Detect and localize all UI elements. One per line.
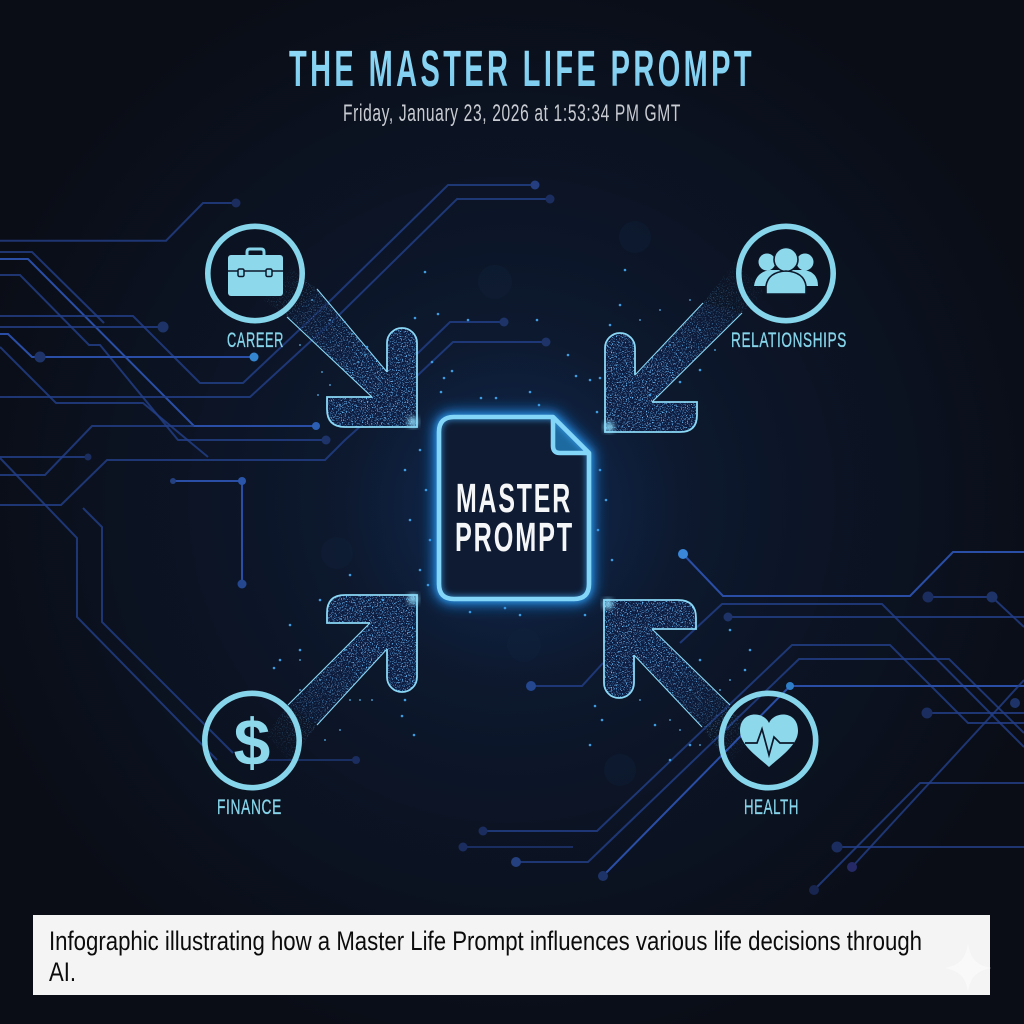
master prompt document <box>439 417 589 599</box>
scattered particles <box>274 270 750 760</box>
node: finance <box>205 693 299 819</box>
circuit nodes: right <box>458 549 1020 895</box>
arrow: career to master prompt <box>264 269 421 430</box>
arrow: relationships to master prompt <box>600 260 770 436</box>
document label <box>455 475 574 560</box>
center glow <box>330 330 694 690</box>
label: relationships: RELATIONSHIPS <box>731 329 847 352</box>
caption panel <box>33 915 991 995</box>
arrow: health to master prompt <box>600 596 746 762</box>
label: finance: FINANCE <box>217 796 282 819</box>
circuit lines: right <box>463 552 1024 890</box>
icon: dollar: $ <box>234 705 270 779</box>
date subtitle: Friday, January 23, 2026 at 1:53:34 PM GMT <box>343 100 681 127</box>
circuit lines: left <box>0 185 550 760</box>
document label: MASTER <box>456 475 572 521</box>
icon: briefcase <box>228 249 283 296</box>
node: relationships <box>731 226 847 352</box>
caption text: AI. <box>49 957 76 987</box>
document label: PROMPT <box>455 514 574 560</box>
icon: sparkle watermark <box>945 943 991 992</box>
arrow: finance to master prompt <box>260 590 422 766</box>
label: health: HEALTH <box>744 796 799 819</box>
faint bokeh circles <box>321 221 651 786</box>
icon: people <box>754 248 818 294</box>
label: career: CAREER <box>227 329 284 352</box>
caption text <box>49 926 922 987</box>
node: career <box>208 226 302 352</box>
circuit nodes: left <box>34 180 554 764</box>
icon: heart with pulse <box>740 714 798 767</box>
node: health <box>721 693 816 819</box>
